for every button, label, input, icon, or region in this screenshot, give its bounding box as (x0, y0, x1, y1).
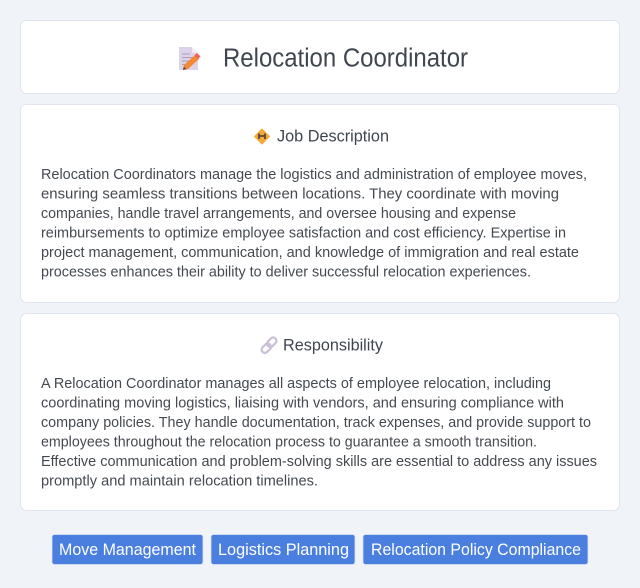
tag: move management (52, 534, 203, 564)
text block: job description: project management, communication, and knowledge of immigration and real estate (41, 244, 579, 261)
icon: orange diamond (254, 129, 270, 144)
text block: job description: companies, handle travel arrangements, and oversee housing and expense (41, 205, 516, 222)
panel: job description (20, 104, 620, 302)
tag: logistics planning: Logistics Planning (218, 540, 349, 559)
text block: job description (41, 166, 587, 280)
tag: relocation policy compliance (363, 534, 588, 564)
text block: responsibility: promptly and maintain relocation timelines. (41, 472, 318, 490)
heading: responsibility: Responsibility (283, 336, 383, 354)
title: Relocation Coordinator (223, 44, 468, 72)
panel: title header (20, 20, 620, 94)
text block: responsibility: Effective communication and problem-solving skills are essential to address any issues (41, 453, 597, 470)
text block: responsibility: company policies. They handle documentation, track expenses, and provide support to (41, 414, 591, 431)
icon: chain link (260, 336, 278, 354)
text block: job description: processes enhances their ability to deliver successful relocation experiences. (41, 264, 531, 280)
text block: responsibility (41, 375, 597, 490)
text block: job description: Relocation Coordinators manage the logistics and administration of employee moves, (41, 166, 587, 183)
tag: logistics planning (211, 534, 355, 564)
text block: job description: reimbursements to optimize employee satisfaction and cost efficiency. Expertise in (41, 224, 566, 242)
heading: job description: Job Description (277, 126, 389, 146)
tag: move management: Move Management (59, 540, 196, 559)
text block: job description: ensuring seamless transitions between locations. They coordinate with moving (41, 186, 559, 202)
icon: document with pencil (179, 47, 200, 70)
text block: responsibility: A Relocation Coordinator manages all aspects of employee relocation, including (41, 375, 551, 392)
panel: responsibility (20, 314, 620, 510)
text block: responsibility: employees throughout the relocation process to guarantee a smooth transition. (41, 434, 537, 450)
tag: relocation policy compliance: Relocation Policy Compliance (371, 540, 581, 559)
text block: responsibility: coordinating moving logistics, liaising with vendors, and ensuring compliance with (41, 394, 564, 412)
